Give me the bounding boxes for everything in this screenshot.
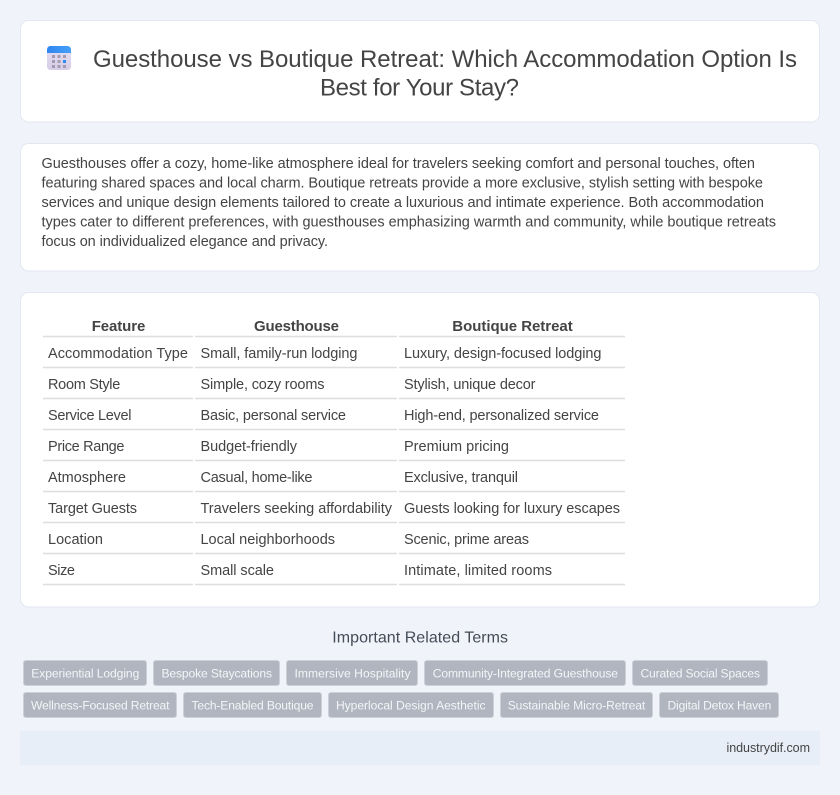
icon: calendar bbox=[47, 46, 71, 70]
row: accommodation type: Luxury, design-focused lodging bbox=[404, 346, 602, 362]
title: Guesthouse vs Boutique Retreat: Which Accommodation Option Is bbox=[93, 46, 797, 73]
panel: introduction text: types cater to different preferences, with guesthouses emphasizing warmth and community, while boutique retreats bbox=[42, 214, 776, 230]
panel: introduction text: focus on individualized elegance and privacy. bbox=[42, 234, 328, 250]
panel: comparison table bbox=[20, 292, 820, 607]
table header: Boutique Retreat bbox=[452, 318, 573, 335]
tag: Hyperlocal Design Aesthetic bbox=[336, 698, 486, 712]
table header: Guesthouse bbox=[254, 318, 339, 335]
panel: introduction text: Guesthouses offer a cozy, home-like atmosphere ideal for travelers seeking comfort and personal touches, often bbox=[42, 156, 755, 172]
tag: Tech-Enabled Boutique bbox=[192, 698, 314, 712]
tag bbox=[24, 692, 176, 718]
panel: introduction text: services and unique design elements tailored to create a luxurious and intimate experience. Both accommodation bbox=[42, 195, 764, 211]
tag: Immersive Hospitality bbox=[294, 666, 411, 680]
panel: introduction text bbox=[20, 144, 820, 271]
row: size: Size bbox=[48, 563, 75, 579]
tag bbox=[500, 692, 652, 718]
tag: Digital Detox Haven bbox=[668, 698, 771, 712]
row: accommodation type: Small, family-run lodging bbox=[200, 346, 358, 362]
row: room style: Stylish, unique decor bbox=[404, 377, 536, 393]
tag: Experiential Lodging bbox=[31, 666, 139, 680]
heading: important related terms: Important Related Terms bbox=[332, 630, 508, 647]
row: target guests bbox=[48, 501, 620, 517]
row: atmosphere: Atmosphere bbox=[48, 470, 126, 486]
row: target guests: Guests looking for luxury escapes bbox=[404, 501, 620, 517]
row: price range: Budget-friendly bbox=[200, 439, 298, 455]
row: target guests: Target Guests bbox=[48, 501, 137, 517]
row: target guests: Travelers seeking affordability bbox=[200, 501, 393, 517]
row: atmosphere: Exclusive, tranquil bbox=[404, 470, 518, 486]
row: location bbox=[48, 532, 529, 548]
table header bbox=[92, 318, 573, 335]
table header: Feature bbox=[92, 318, 145, 335]
tag: Community-Integrated Guesthouse bbox=[433, 666, 618, 680]
tag bbox=[424, 660, 626, 686]
row: room style: Simple, cozy rooms bbox=[200, 377, 324, 393]
row: room style bbox=[48, 377, 536, 393]
row: service level bbox=[48, 408, 599, 424]
footer bar bbox=[20, 731, 820, 765]
row: accommodation type bbox=[48, 346, 602, 362]
row: price range: Price Range bbox=[48, 439, 124, 455]
panel: title card bbox=[20, 20, 820, 122]
tag: Sustainable Micro-Retreat bbox=[508, 698, 646, 712]
tag: Wellness-Focused Retreat bbox=[31, 698, 170, 712]
row: service level: Basic, personal service bbox=[200, 408, 346, 424]
title: Best for Your Stay? bbox=[320, 74, 519, 102]
row: service level: High-end, personalized service bbox=[404, 408, 599, 424]
row: location: Location bbox=[48, 532, 103, 548]
row: service level: Service Level bbox=[48, 408, 132, 424]
tag: Bespoke Staycations bbox=[162, 666, 272, 680]
row: price range: Premium pricing bbox=[404, 439, 509, 455]
row: size: Intimate, limited rooms bbox=[404, 563, 552, 579]
title bbox=[93, 46, 797, 102]
panel: introduction text: featuring shared spaces and local charm. Boutique retreats provide a more exclusive, stylish setting with bespoke bbox=[42, 176, 763, 192]
row: location: Scenic, prime areas bbox=[404, 532, 529, 548]
row: price range bbox=[48, 439, 509, 455]
row: atmosphere bbox=[48, 470, 518, 486]
row: size: Small scale bbox=[200, 563, 274, 579]
tag: Curated Social Spaces bbox=[640, 666, 760, 680]
row: room style: Room Style bbox=[48, 377, 120, 393]
tag bbox=[660, 692, 778, 718]
row: accommodation type: Accommodation Type bbox=[48, 346, 188, 362]
tag bbox=[286, 660, 418, 686]
row: size bbox=[48, 563, 552, 579]
tag bbox=[184, 692, 322, 718]
tag bbox=[24, 660, 146, 686]
row: location: Local neighborhoods bbox=[200, 532, 335, 548]
tag bbox=[154, 660, 280, 686]
tag bbox=[632, 660, 768, 686]
related term tags bbox=[24, 660, 778, 718]
footer bar: industrydif.com bbox=[726, 741, 810, 755]
row: atmosphere: Casual, home-like bbox=[200, 470, 312, 486]
tag bbox=[328, 692, 494, 718]
